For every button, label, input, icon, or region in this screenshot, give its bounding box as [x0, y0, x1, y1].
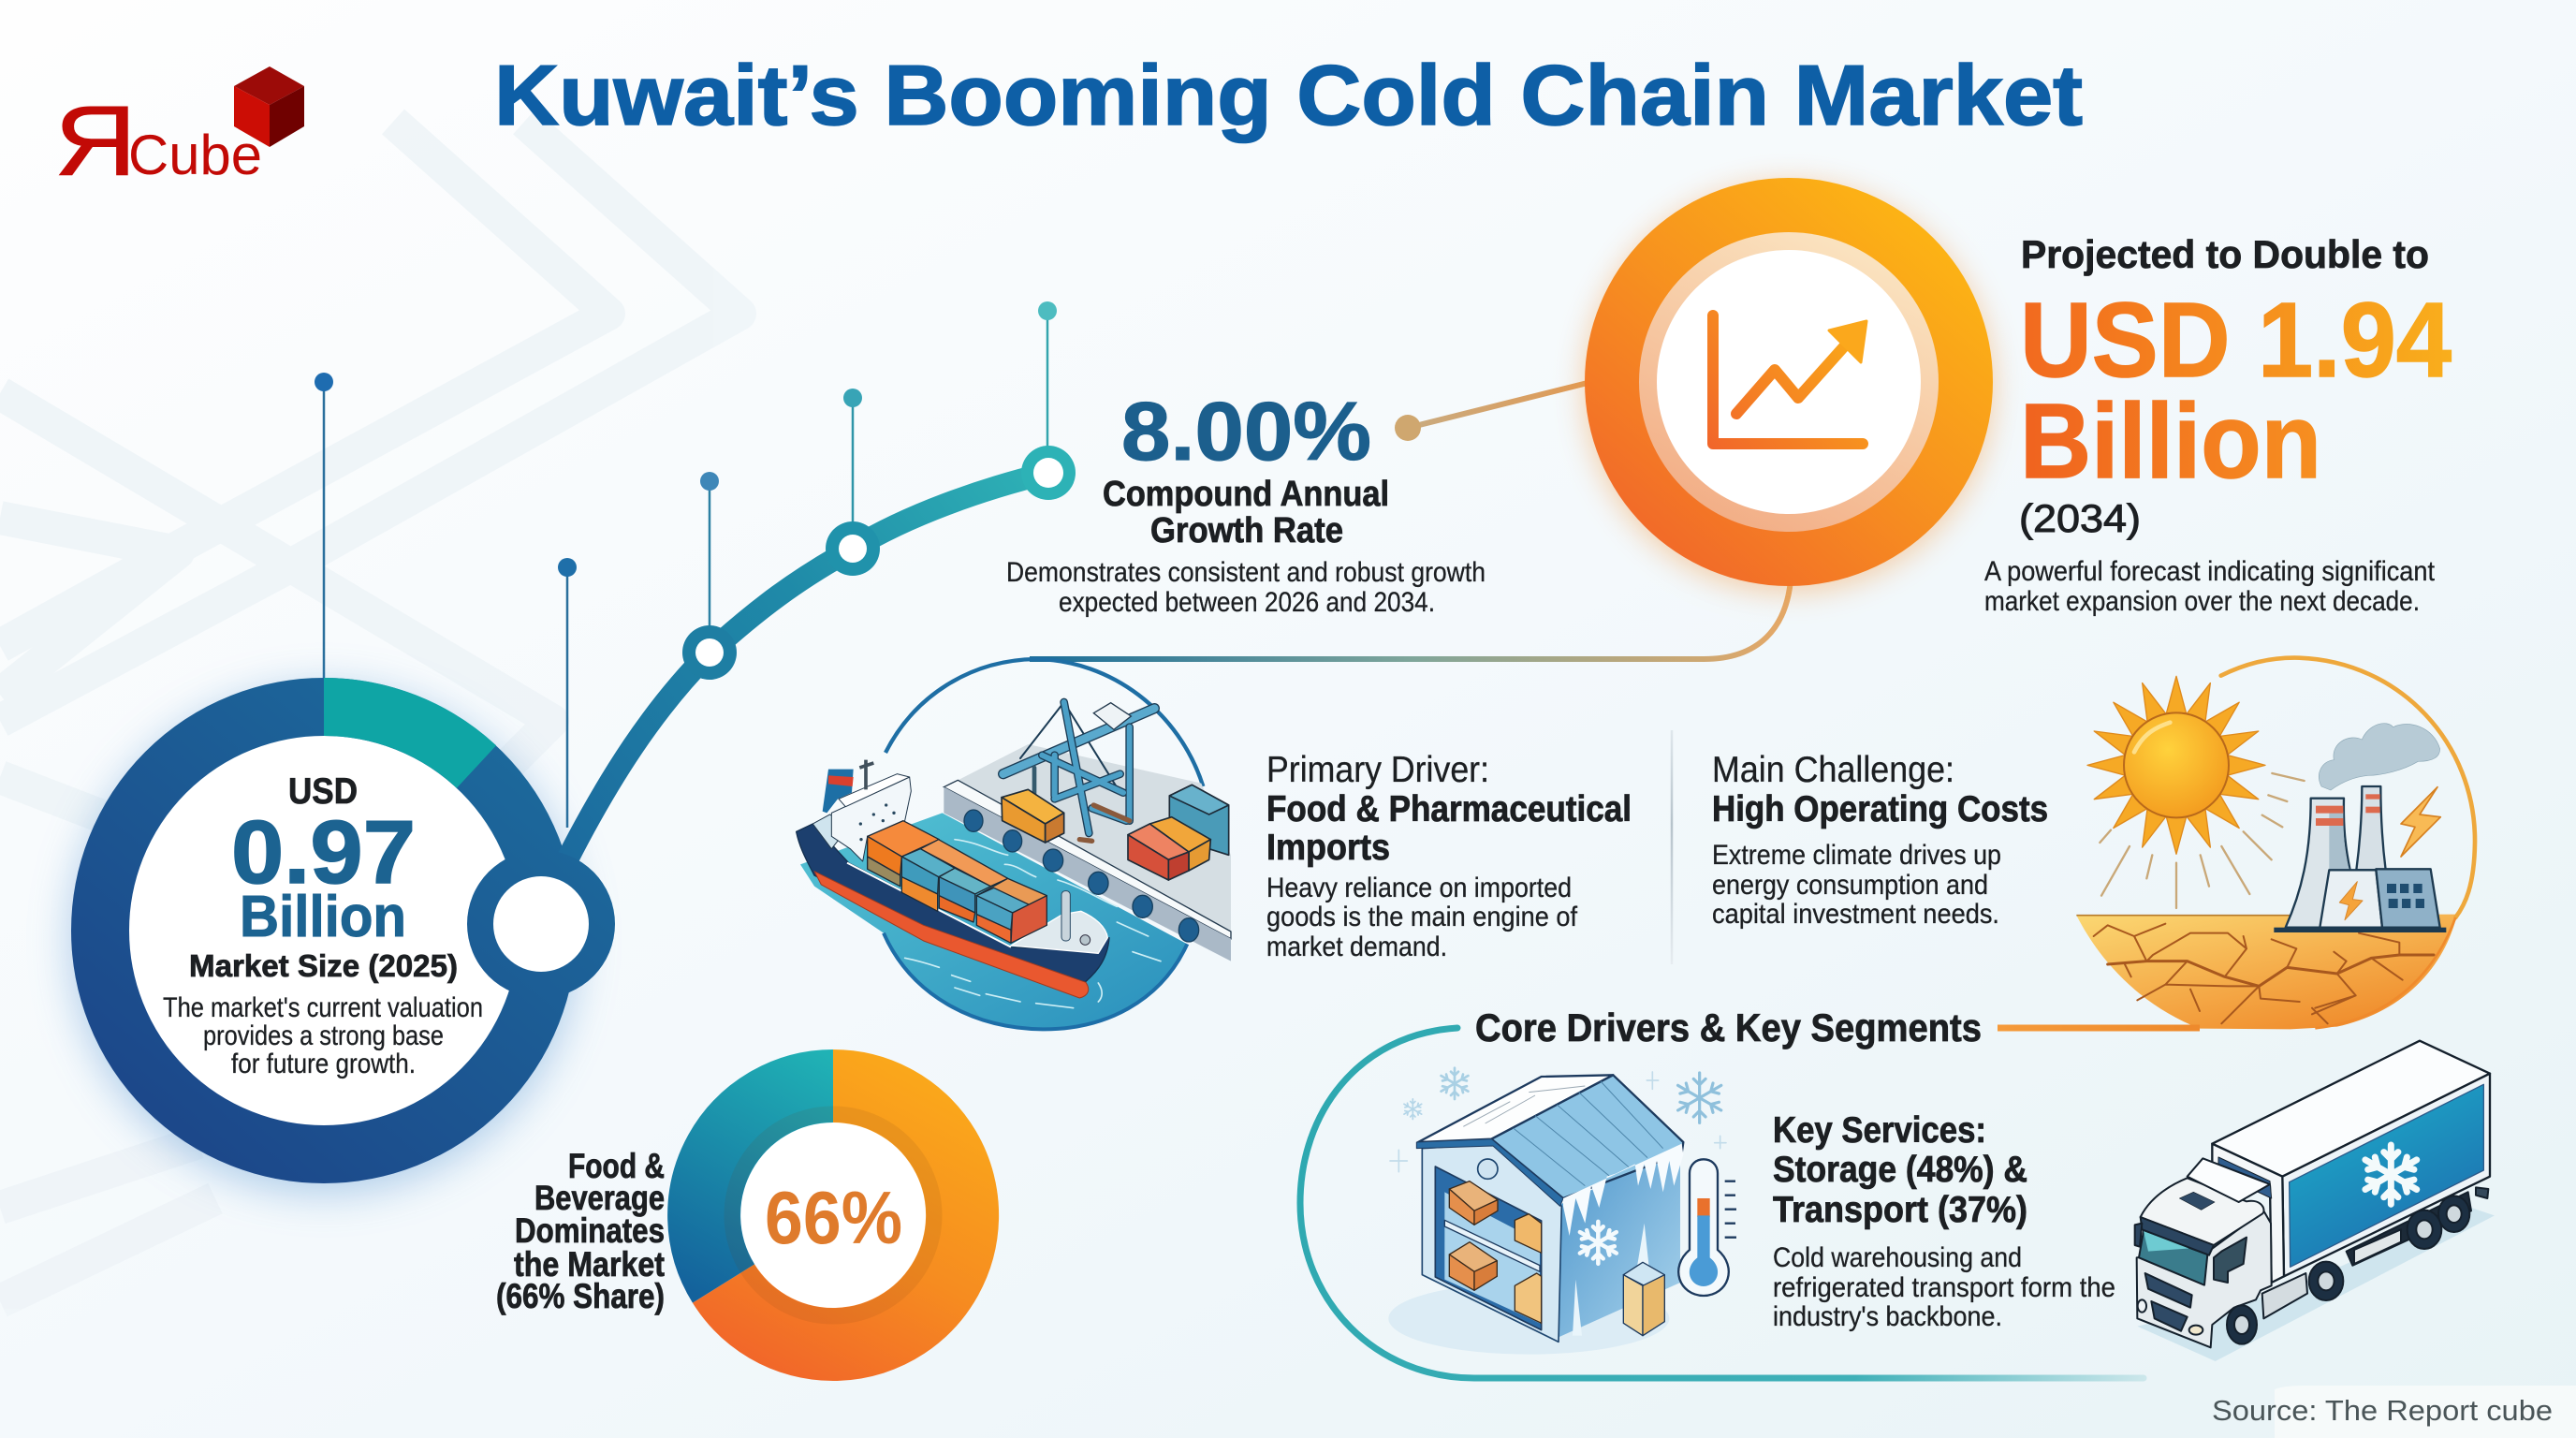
panel: CAGR [1006, 385, 1486, 618]
ice and icicles [1563, 1144, 1683, 1236]
waves [905, 840, 1161, 1008]
panel: key services text [1773, 1110, 2115, 1332]
trailer [2212, 1041, 2490, 1283]
panel: forecast text: A powerful forecast indicating significant [1984, 556, 2436, 587]
label: food and beverage share: Beverage [534, 1179, 665, 1217]
panel: CAGR: 8.00% [1121, 385, 1371, 477]
thermometer [1678, 1159, 1736, 1296]
panel: forecast text: Billion [2020, 382, 2321, 500]
growth curve [562, 473, 1048, 871]
panel: main challenge text: energy consumption and [1712, 870, 1988, 901]
panel: CAGR: expected between 2026 and 2034. [1059, 587, 1435, 618]
panel: key services text: refrigerated transport form the [1773, 1272, 2115, 1303]
connector: forecast to driver [1030, 580, 1791, 659]
snowflakes [1390, 1068, 1726, 1172]
ring arc [886, 659, 1203, 786]
crane [1003, 702, 1154, 841]
label: food and beverage share [496, 1147, 665, 1315]
logo: RCube [54, 66, 304, 197]
ground [2076, 915, 2457, 1029]
market size text [163, 771, 483, 1079]
hanging container [1002, 789, 1064, 843]
panel: forecast text: USD 1.94 [2020, 281, 2452, 399]
market size text: 0.97 [231, 802, 416, 902]
icon: red cube [234, 66, 304, 147]
logo: RCube: Cube [128, 124, 262, 186]
icon: chart arrow [1713, 315, 1866, 444]
ship containers [868, 821, 1046, 943]
market size text: USD [288, 771, 358, 812]
icon: refrigerated truck [2135, 1041, 2495, 1361]
curve nodes [467, 446, 1076, 998]
panel: forecast text: (2034) [2019, 496, 2141, 540]
panel: primary driver text: Imports [1266, 828, 1390, 868]
panel: primary driver text: Primary Driver: [1266, 750, 1489, 790]
white flake on wall [1577, 1222, 1619, 1264]
donut chart: 66% share: 66% [765, 1176, 902, 1259]
market size text: provides a strong base [203, 1020, 444, 1051]
panel: key services text: Transport (37%) [1773, 1190, 2027, 1230]
panel: forecast ring [1585, 178, 1993, 586]
panel: main challenge text [1712, 750, 2048, 930]
growth pins [315, 301, 1057, 828]
small crate [1623, 1262, 1664, 1336]
ice pool [1388, 1283, 1669, 1355]
market size text: The market's current valuation [163, 992, 483, 1023]
orange ring [2221, 658, 2475, 917]
icon: cold warehouse [1388, 1068, 1736, 1355]
panel: primary driver text [1266, 750, 1632, 962]
panel: market size 2025 ring [100, 446, 1076, 1154]
label: food and beverage share: Dominates [515, 1211, 665, 1250]
panel: key services text: Key Services: [1773, 1110, 1986, 1151]
panel: main challenge text: Extreme climate drives up [1712, 840, 2001, 871]
panel: forecast text [1984, 232, 2452, 617]
panel: primary driver text: Food & Pharmaceutical [1266, 789, 1632, 829]
panel: key services text: Storage (48%) & [1773, 1150, 2027, 1190]
panel: forecast text: market expansion over the next decade. [1984, 586, 2420, 617]
panel: primary driver text: Heavy reliance on imported [1266, 873, 1572, 903]
panel: main challenge text: capital investment needs. [1712, 899, 1999, 930]
stacked containers [1128, 785, 1229, 880]
panel: forecast text: Projected to Double to [2021, 232, 2429, 276]
panel: CAGR: Compound Annual [1103, 475, 1389, 514]
market size text: for future growth. [231, 1049, 416, 1079]
icon: container ship and port [797, 659, 1231, 1029]
superstructure [812, 760, 911, 861]
quay [944, 744, 1231, 961]
factory [2274, 786, 2446, 932]
panel: key services text: Cold warehousing and [1773, 1242, 2022, 1273]
market size text: Billion [240, 885, 406, 949]
logo: RCube: Я [54, 86, 137, 197]
label: food and beverage share: the Market [514, 1245, 665, 1284]
panel: key services text: industry's backbone. [1773, 1301, 2002, 1332]
smoke [2319, 724, 2440, 790]
donut chart: 66% share [704, 1086, 962, 1344]
panel: CAGR: Growth Rate [1150, 511, 1343, 550]
boxes [1449, 1181, 1542, 1323]
ship hull [797, 824, 1109, 998]
label: food and beverage share: (66% Share) [496, 1277, 665, 1315]
truck shadow [2137, 1208, 2495, 1361]
icon: sun, factory and cracked ground [2076, 658, 2475, 1029]
panel: primary driver text: goods is the main engine of [1266, 902, 1578, 932]
cracks [2094, 924, 2434, 1023]
sun [2087, 676, 2265, 854]
title: Kuwait’s Booming Cold Chain Market [494, 49, 2083, 143]
source note: Source: The Report cube [2212, 1394, 2553, 1427]
chassis and wheels [2262, 1187, 2488, 1318]
panel: main challenge text: Main Challenge: [1712, 750, 1954, 790]
sun rays [2100, 773, 2305, 908]
bracket: teal curve [1300, 1028, 2144, 1378]
water [800, 813, 1187, 1029]
market size text: Market Size (2025) [189, 948, 458, 983]
panel: CAGR: Demonstrates consistent and robust growth [1006, 557, 1486, 588]
connector: CAGR to forecast [1395, 382, 1591, 441]
label: food and beverage share: Food & [568, 1147, 665, 1185]
cab [2135, 1158, 2272, 1347]
building [1416, 1075, 1683, 1342]
panel: main challenge text: High Operating Costs [1712, 789, 2048, 829]
heading: core drivers: Core Drivers & Key Segments [1475, 1005, 1982, 1049]
panel: primary driver text: market demand. [1266, 932, 1447, 962]
line: orange rule [1998, 1024, 2200, 1032]
